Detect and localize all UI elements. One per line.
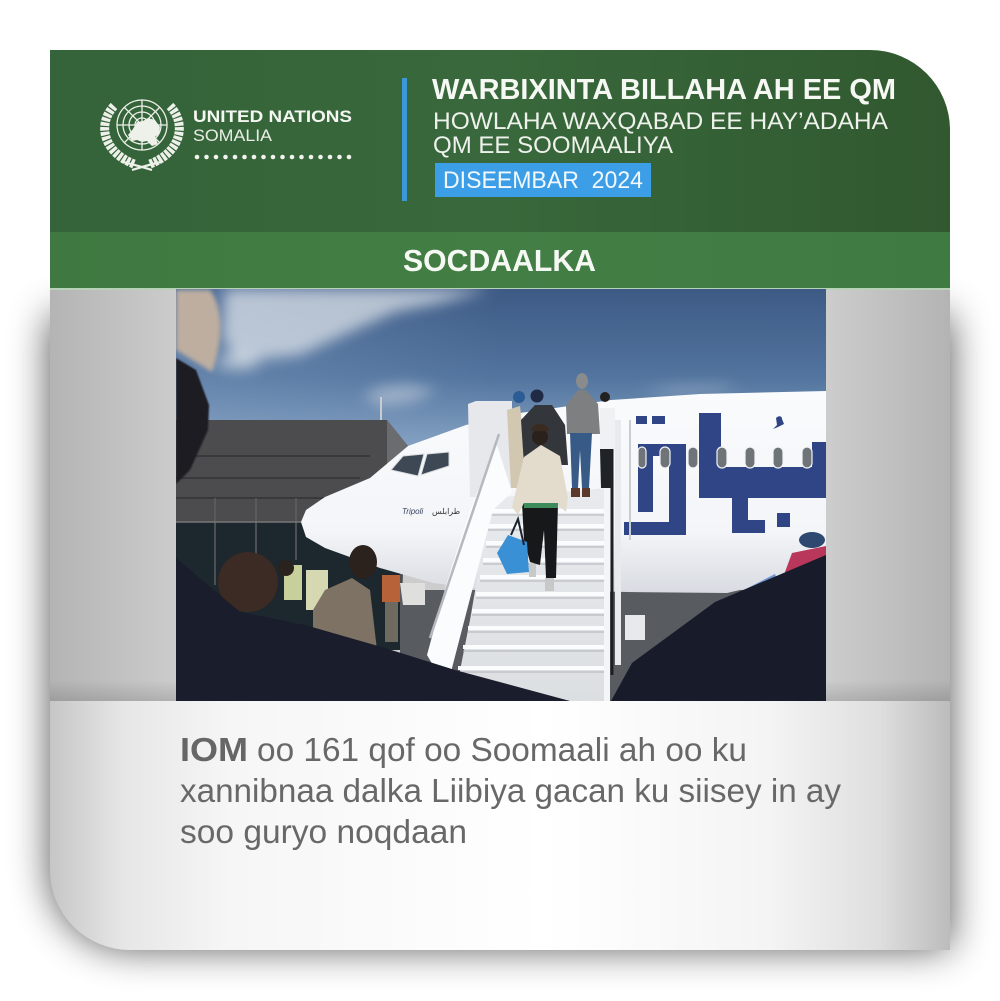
- caption text: oo 161 qof oo Soomaali ah oo ku: [257, 731, 747, 768]
- photo: passengers leaving aircraft: [176, 289, 826, 701]
- person: beige jacket: [313, 545, 377, 650]
- stairs: [454, 488, 607, 701]
- building: [176, 420, 408, 650]
- lamp post: [380, 397, 382, 420]
- caption text: xannibnaa dalka Liibiya gacan ku siisey in ay: [180, 772, 841, 809]
- subtitle line 1: HOWLAHA WAXQABAD EE HAY’ADAHA: [433, 108, 889, 135]
- text: UNITED NATIONS: UNITED NATIONS: [193, 108, 352, 126]
- person: grey hoodie: [566, 373, 600, 497]
- nose label: Tripoli: [402, 507, 423, 516]
- title: WARBIXINTA BILLAHA AH EE QM: [432, 74, 896, 106]
- person: dark jacket: [521, 390, 568, 465]
- dotted rule: [195, 155, 351, 159]
- person: bald man: [218, 552, 278, 612]
- aircraft door: [468, 401, 512, 498]
- caption text: IOM: [180, 731, 248, 768]
- foreground: left head and cap: [176, 290, 220, 484]
- text: SOMALIA: SOMALIA: [193, 127, 272, 145]
- panel: lower caption background: [50, 700, 950, 950]
- sky: [176, 289, 826, 449]
- section band: [50, 232, 950, 288]
- person: main passenger with bag: [497, 424, 568, 591]
- aircraft fuselage: [301, 391, 826, 593]
- blue divider bar: [402, 78, 407, 201]
- icon: UN emblem: [105, 100, 179, 170]
- flags: [745, 574, 776, 590]
- caption text: soo guryo noqdaan: [180, 813, 467, 850]
- date badge: DISEEMBAR 2024: [443, 167, 643, 194]
- person: guard: [507, 391, 525, 488]
- person: pink on right: [785, 532, 826, 572]
- cockpit windows: [391, 452, 449, 476]
- cabin windows: [638, 447, 812, 468]
- logo: United Nations Somalia: [105, 100, 352, 170]
- panel: grey photo band: [50, 288, 950, 701]
- subtitle line 2: QM EE SOOMAALIYA: [433, 132, 674, 159]
- arabic name: طرابلس: [432, 507, 460, 516]
- ground crew group: [278, 560, 425, 642]
- foreground: right shoulder: [611, 555, 826, 701]
- panel: green header: [50, 50, 950, 232]
- tarmac: [400, 590, 743, 701]
- clouds: [216, 289, 740, 406]
- person: white shirt: [600, 392, 615, 488]
- stair rails: [430, 420, 645, 701]
- card drop shadow: [50, 315, 950, 948]
- section heading: SOCDAALKA: [403, 243, 596, 278]
- stair side panel: [427, 446, 511, 669]
- foreground: left shoulder: [176, 558, 570, 701]
- aircraft livery: [624, 413, 826, 535]
- caption text: [180, 731, 841, 850]
